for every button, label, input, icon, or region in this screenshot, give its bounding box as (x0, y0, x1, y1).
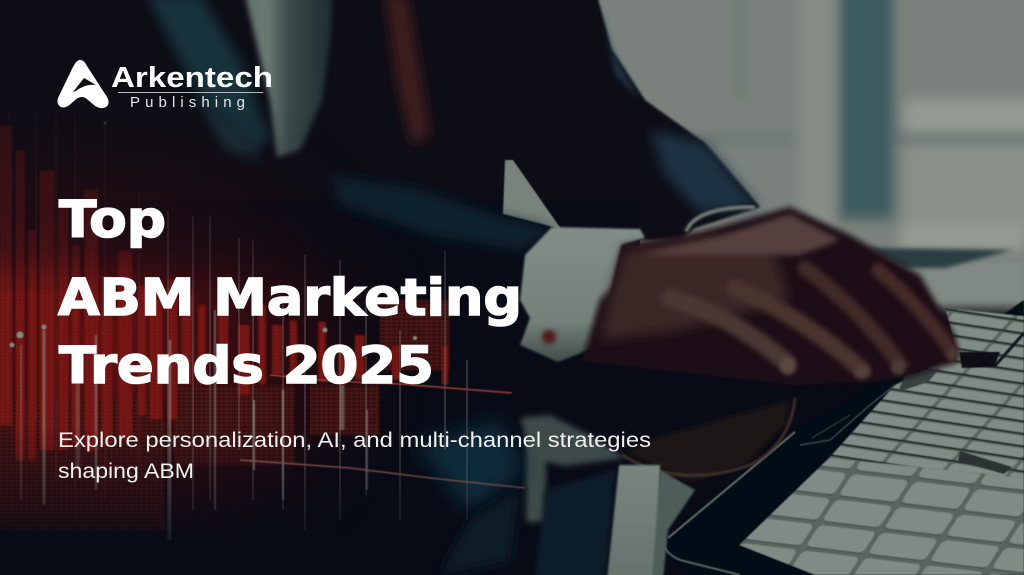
keyboard keys (738, 308, 1024, 575)
subtitle line 1: Explore personalization, AI, and multi-channel strategies (58, 429, 651, 452)
cufflink (542, 330, 556, 344)
hand (582, 207, 958, 385)
logo divider (118, 92, 263, 93)
desk surface (870, 262, 1024, 302)
publishing label: Publishing (130, 94, 245, 111)
tie (385, 0, 430, 145)
wall triangle between arm and body (503, 160, 561, 229)
glowing line segments (21, 310, 367, 540)
icon: A mark (57, 60, 109, 108)
office wall and window (480, 0, 1024, 310)
title line 2: ABM Marketing (58, 269, 522, 328)
wordmark: Arkentech (111, 62, 273, 94)
reflection of hand (622, 398, 795, 482)
function row (800, 385, 895, 445)
fingers (670, 298, 786, 362)
subtitle (58, 429, 651, 483)
title line 1: Top (59, 191, 166, 250)
candlestick bars (0, 125, 448, 460)
lower dim texture (0, 300, 450, 530)
back of hand (600, 238, 790, 340)
title (58, 191, 522, 396)
far shirt cuff (686, 207, 755, 232)
near shirt cuff (520, 227, 645, 362)
thin vertical lines (8, 110, 468, 540)
keyboard dark accents (898, 333, 1024, 474)
title line 3: Trends 2025 (59, 337, 434, 396)
red financial chart overlay (0, 110, 526, 540)
laptop edge (665, 541, 740, 575)
subtitle line 2: shaping ABM (58, 460, 194, 483)
trend lines (270, 375, 512, 393)
suit jacket (0, 0, 760, 240)
lapel (147, 0, 270, 150)
sleeve highlights (650, 130, 758, 212)
red glow (0, 158, 368, 522)
desk shadow (868, 248, 1012, 268)
shirt (245, 0, 333, 157)
logo: Arkentech Publishing (57, 60, 273, 111)
node dots (10, 122, 417, 348)
laptop black band (665, 300, 1024, 575)
fingertips (780, 357, 796, 375)
reflection of cuff (520, 415, 625, 466)
